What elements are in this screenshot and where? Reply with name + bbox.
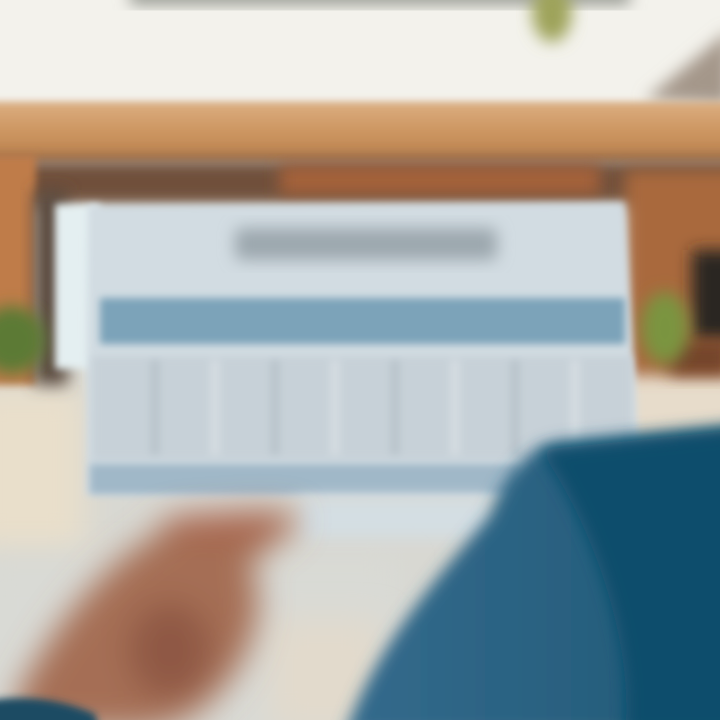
card title [235,228,497,260]
right wood wall and plant [625,170,720,375]
ceiling plant and top right shape [532,0,720,105]
card grid columns [92,356,632,460]
chart card [55,202,638,538]
hand [15,511,298,720]
card header band [100,298,625,344]
blue sleeve [345,425,720,720]
dark cuff [0,698,100,720]
card footer band [90,464,520,494]
left pillar [0,155,68,385]
wooden beam [0,102,720,205]
